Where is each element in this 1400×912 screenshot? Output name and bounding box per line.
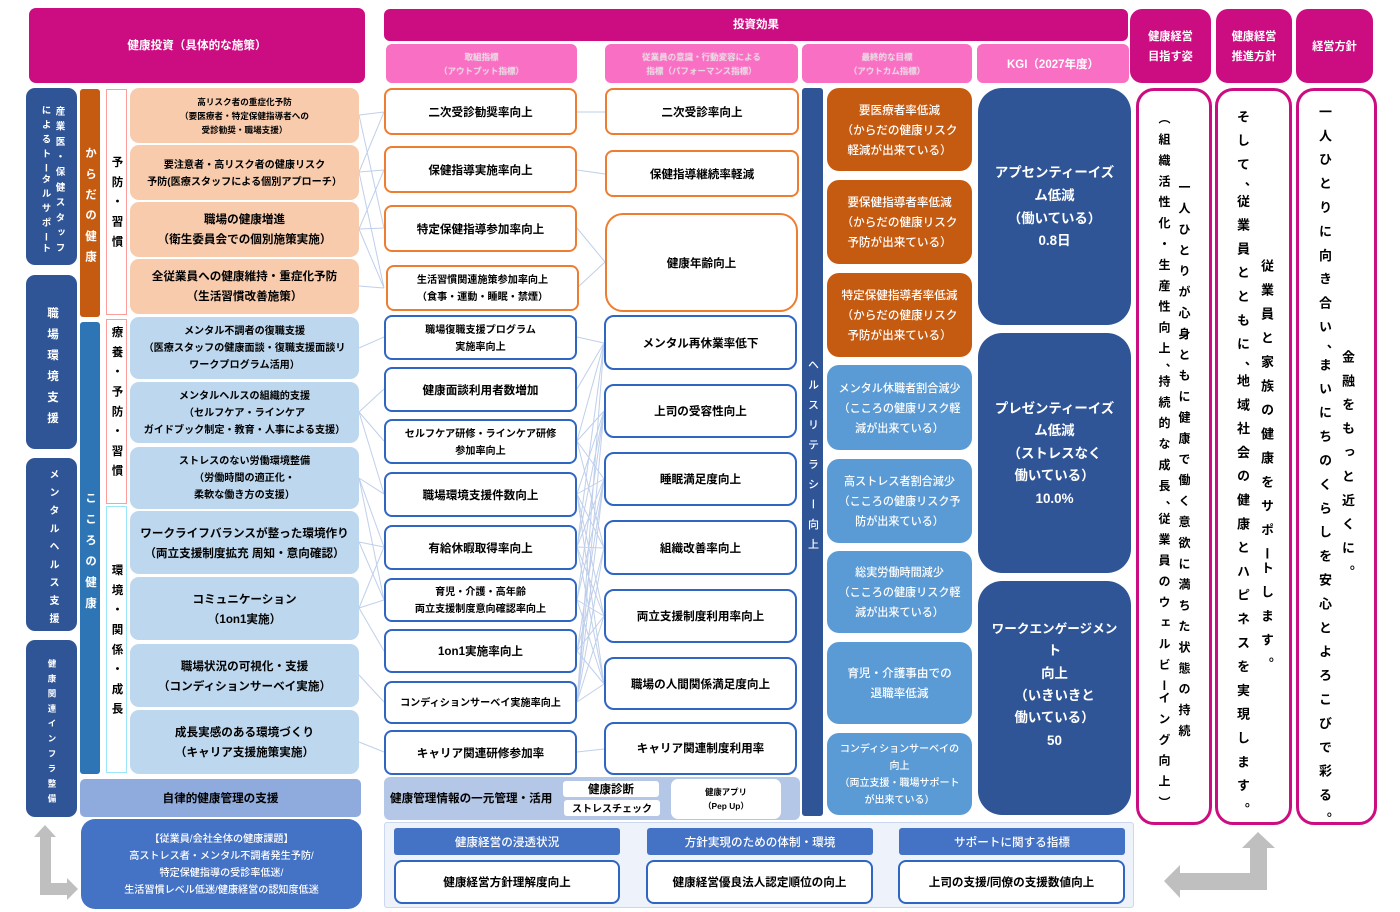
band: physical health xyxy=(80,89,100,317)
measure: workplace visualization: 職場状況の可視化・支援 xyxy=(181,660,308,672)
KGI: absenteeism: 0.8日 xyxy=(1038,233,1070,248)
measure: all-employee health maintenance xyxy=(130,259,359,314)
tag: stress check: ストレスチェック xyxy=(572,804,652,814)
subheading: KGI: KGI（2027年度） xyxy=(1007,58,1099,70)
band: prevention and habits: 予防・習慣 xyxy=(110,156,122,255)
subheading: outcome measures: 最終的な目標 xyxy=(861,52,912,62)
outcome: condition survey improvement: が出来ている） xyxy=(864,795,934,806)
output: health guidance implementation: 保健指導実施率向上 xyxy=(428,164,533,176)
measure: growth environment: 成長実感のある環境づくり xyxy=(175,726,314,739)
performance: organization improvement xyxy=(604,520,797,575)
output: health interview use xyxy=(384,367,577,412)
performance: health guidance continuity: 保健指導継続率軽減 xyxy=(650,168,754,180)
measure: organizational mental health xyxy=(130,382,359,443)
measure: high-risk prevention: （要医療者・特定保健指導者への xyxy=(180,110,309,120)
panel: left support label 1 xyxy=(26,88,77,265)
output: specific guidance participation xyxy=(384,205,577,252)
KGI: absenteeism xyxy=(978,88,1131,325)
tag: health app: （Pep Up） xyxy=(703,801,749,811)
callout: health issues: 特定保健指導の受診率低迷/ xyxy=(160,868,283,878)
heading: promotion policy xyxy=(1216,9,1292,83)
band: environment, relations and growth: 環境・関係・成長 xyxy=(110,564,122,722)
band: environment, relations and growth xyxy=(106,506,127,773)
outcome: working hours xyxy=(827,551,972,633)
output: lifestyle program participation: （食事・運動・睡眠・禁煙） xyxy=(417,292,548,303)
outcome: working hours: （こころの健康リスク軽 xyxy=(838,587,961,599)
text: finance closer: 金融をもっと近くに 。 xyxy=(1340,350,1355,578)
measure: return-to-work support: ワークプログラム活用） xyxy=(189,360,300,371)
subheading: support indicators xyxy=(899,828,1125,855)
KGI: work engagement: 働いている） xyxy=(1015,710,1094,725)
performance: balance support use: 両立支援制度利用率向上 xyxy=(637,610,764,623)
measure: autonomous health management: 自律的健康管理の支援 xyxy=(163,792,278,804)
tag: stress check xyxy=(564,800,660,816)
measure: communication: コミュニケーション xyxy=(192,592,297,606)
output: health interview use: 健康面談利用者数増加 xyxy=(423,384,538,396)
subheading: performance measures xyxy=(605,44,798,83)
callout: health issues xyxy=(81,819,362,909)
heading: management policy xyxy=(1296,9,1373,83)
KGI: work engagement: （いきいきと xyxy=(1014,688,1095,703)
text: occupational staff: 産業医・保健スタッフ xyxy=(54,106,64,258)
measure: return-to-work support xyxy=(130,317,359,379)
outcome: care-related resignation: 育児・介護事由での xyxy=(847,667,952,680)
performance: health guidance continuity xyxy=(605,150,799,197)
output: balance support intent: 育児・介護・高年齢 xyxy=(435,587,526,598)
outcome: mental leave ratio xyxy=(827,365,972,450)
heading: promotion policy: 健康経営 xyxy=(1232,31,1276,43)
output: specific guidance participation: 特定保健指導参加率向上 xyxy=(417,222,544,236)
panel: workplace environment support xyxy=(26,275,77,449)
output: care training xyxy=(384,419,577,464)
subheading: outcome measures: （アウトカム指標） xyxy=(849,66,925,76)
performance: manager receptiveness: 上司の受容性向上 xyxy=(654,405,747,418)
output: workplace support cases: 職場環境支援件数向上 xyxy=(423,488,538,502)
performance: sleep satisfaction xyxy=(604,452,797,506)
KGI: presenteeism: 10.0% xyxy=(1036,491,1073,506)
measure: stress-free labor environment: （労働時間の適正化・ xyxy=(194,473,295,484)
subheading: output measures: （アウトプット指標） xyxy=(439,66,524,76)
output: lifestyle program participation: 生活習慣関連施策参加率向上 xyxy=(417,275,548,286)
heading: vision: 目指す姿 xyxy=(1148,51,1193,63)
KGI: absenteeism: ム低減 xyxy=(1034,188,1075,203)
output: balance support intent xyxy=(384,578,577,622)
output: paid leave: 有給休暇取得率向上 xyxy=(428,542,533,554)
text: unified management: 健康管理情報の一元管理・活用 xyxy=(390,792,552,804)
measure: health risk prevention: 要注意者・高リスク者の健康リスク xyxy=(164,160,325,170)
outcome: mental leave ratio: 減が出来ている） xyxy=(855,422,944,434)
performance: health age xyxy=(605,213,798,312)
performance: manager receptiveness xyxy=(604,384,797,438)
heading: management policy: 経営方針 xyxy=(1312,41,1357,53)
output: return-to-work program: 職場復職支援プログラム xyxy=(425,324,536,336)
band: prevention and habits xyxy=(106,89,127,315)
heading: investment effect: 投資効果 xyxy=(733,19,779,31)
output: return-to-work program xyxy=(384,315,577,360)
performance: balance support use xyxy=(604,589,797,643)
measure: growth environment xyxy=(130,710,359,774)
performance: secondary exam: 二次受診率向上 xyxy=(661,106,743,118)
outcome: care-required rate: （からだの健康リスク xyxy=(842,124,957,136)
subheading: output measures xyxy=(386,44,577,83)
performance: mental re-leave: メンタル再休業率低下 xyxy=(643,336,758,350)
callout: health issues: 高ストレス者・メンタル不調者発生予防/ xyxy=(129,850,314,862)
panel: promotion policy text xyxy=(1215,88,1292,825)
measure: organizational mental health: ガイドブック制定・教育・人事による支援） xyxy=(144,425,345,436)
measure: organizational mental health: （セルフケア・ラインケア xyxy=(184,408,305,419)
outcome: condition survey improvement: （両立支援・職場サポート xyxy=(840,778,960,789)
outcome: high stress ratio: 高ストレス者割合減少 xyxy=(844,476,955,488)
outcome: condition survey improvement: コンディションサーベイの xyxy=(840,744,959,755)
KGI: absenteeism: アプセンティーイズ xyxy=(995,165,1114,180)
tag: health checkup: 健康診断 xyxy=(588,784,634,796)
callout: health issues: 生活習慣レベル低迷/健康経営の認知度低迷 xyxy=(124,884,319,896)
KGI: presenteeism: プレゼンティーイズ xyxy=(995,401,1114,416)
arrow: feedback right xyxy=(1164,832,1275,898)
KGI: work engagement: ト xyxy=(1048,643,1061,658)
heading: investment effect xyxy=(384,9,1128,41)
output: lifestyle program participation xyxy=(386,265,579,311)
measure: workplace visualization xyxy=(130,644,359,707)
outcome: care-required rate xyxy=(827,88,972,171)
measure: workplace health promotion: 職場の健康増進 xyxy=(204,213,285,226)
measure: health risk prevention xyxy=(130,145,359,200)
output: 1on1: 1on1実施率向上 xyxy=(438,645,523,658)
measure: all-employee health maintenance: （生活習慣改善施策） xyxy=(187,290,302,303)
outcome: specific guidance rate: 予防が出来ている） xyxy=(847,329,952,342)
panel: health information management xyxy=(384,777,800,820)
output: condition survey: コンディションサーベイ実施率向上 xyxy=(400,698,561,709)
performance: mental re-leave xyxy=(604,315,797,370)
text: community happiness: そして 、 従業員とともに 、 地域社会の健康とハピネスを実現します 。 xyxy=(1235,110,1250,815)
measure: return-to-work support: メンタル不調者の復職支援 xyxy=(184,326,305,337)
outcome: high stress ratio xyxy=(827,459,972,543)
measure: stress-free labor environment: ストレスのない労働環境整備 xyxy=(179,456,310,467)
outcome: condition survey improvement xyxy=(827,733,972,815)
band: mental health: こころの健康 xyxy=(84,492,96,618)
heading: health investment xyxy=(29,8,365,83)
arrow: feedback left xyxy=(34,825,78,900)
panel: health infrastructure xyxy=(26,640,77,817)
KGI: presenteeism xyxy=(978,333,1131,573)
band: treatment, prevention and habits xyxy=(106,319,127,504)
outcome: mental leave ratio: （こころの健康リスク軽 xyxy=(838,402,961,414)
output: care training: 参加率向上 xyxy=(455,446,506,456)
subheading: penetration: 健康経営の浸透状況 xyxy=(455,836,559,848)
output: health guidance implementation xyxy=(384,146,577,193)
bar: health literacy xyxy=(802,88,823,816)
panel: management policy text xyxy=(1296,88,1377,825)
measure: work-life balance xyxy=(130,511,359,574)
outcome: guidance-required rate xyxy=(827,180,972,264)
subheading: performance measures: 従業員の意識・行動変容による xyxy=(642,52,761,62)
heading: vision xyxy=(1130,9,1211,83)
outcome: care-required rate: 要医療者率低減 xyxy=(859,104,940,116)
subheading: support indicators: サポートに関する指標 xyxy=(954,836,1070,848)
KGI: absenteeism: （働いている） xyxy=(1008,210,1101,226)
outcome: care-related resignation xyxy=(827,642,972,724)
panel: vision text xyxy=(1136,88,1212,825)
output: care training: セルフケア研修・ラインケア研修 xyxy=(405,428,556,440)
outcome: care-related resignation: 退職率低減 xyxy=(870,687,928,700)
measure: work-life balance: ワークライフバランスが整った環境作り xyxy=(140,526,349,540)
text: vision main: 一人ひとりが心身ともに健康で働く意欲に満ちた状態の持続 xyxy=(1177,181,1191,745)
panel: workplace environment support: 職場環境支援 xyxy=(46,307,58,433)
text: daily life: 一人ひとりに向き合い 、 まいにちのくらしを安心とよろこびで彩る 。 xyxy=(1317,104,1332,825)
outcome: working hours: 減が出来ている） xyxy=(855,607,944,619)
indicator: certification ranking: 健康経営優良法人認定順位の向上 xyxy=(673,876,846,888)
KGI: presenteeism: ム低減 xyxy=(1034,423,1075,438)
tag: health app xyxy=(671,779,781,819)
outcome: mental leave ratio: メンタル休職者割合減少 xyxy=(838,382,961,394)
measure: communication xyxy=(130,577,359,640)
heading: promotion policy: 推進方針 xyxy=(1232,51,1276,63)
outcome: care-required rate: 軽減が出来ている） xyxy=(847,144,952,156)
measure: workplace health promotion xyxy=(130,202,359,257)
panel: bottom health management indicators xyxy=(384,822,1134,908)
KGI: work engagement: ワークエンゲージメン xyxy=(992,622,1117,636)
measure: stress-free labor environment: 柔軟な働き方の支援） xyxy=(194,490,295,501)
outcome: guidance-required rate: 要保健指導者率低減 xyxy=(847,196,952,209)
bar: health literacy: ヘルスリテラシー向上 xyxy=(806,359,818,558)
measure: return-to-work support: （医療スタッフの健康面談・復職支援面談リ xyxy=(144,343,345,354)
outcome: working hours: 総実労働時間減少 xyxy=(855,567,944,579)
KGI: work engagement: 向上 xyxy=(1041,666,1068,681)
text: total support: によるト ー タルサポ ー ト xyxy=(40,105,50,258)
output: secondary exam recommendation xyxy=(384,88,577,135)
measure: high-risk prevention: 高リスク者の重症化予防 xyxy=(197,96,292,106)
measure: autonomous health management xyxy=(80,779,361,817)
outcome: specific guidance rate xyxy=(827,273,972,357)
tag: health app: 健康アプリ xyxy=(705,787,747,797)
outcome: guidance-required rate: 予防が出来ている） xyxy=(847,236,952,249)
output: workplace support cases xyxy=(384,472,577,517)
indicator: supervisor and colleague support xyxy=(898,860,1125,904)
subheading: KGI xyxy=(977,44,1129,83)
band: mental health xyxy=(80,322,100,774)
measure: growth environment: （キャリア支援施策実施） xyxy=(175,746,314,759)
subheading: performance measures: 指標（パフォーマンス指標） xyxy=(646,66,757,76)
heading: vision: 健康経営 xyxy=(1148,31,1193,43)
measure: high-risk prevention xyxy=(130,88,359,143)
callout: health issues: 【従業員/会社全体の健康課題】 xyxy=(149,834,294,844)
tag: health checkup xyxy=(563,781,659,797)
performance: workplace relations xyxy=(604,657,797,710)
KGI: work engagement xyxy=(978,581,1131,815)
output: paid leave xyxy=(384,525,577,570)
indicator: policy understanding xyxy=(394,860,620,904)
outcome: high stress ratio: （こころの健康リスク予 xyxy=(838,496,961,508)
subheading: penetration xyxy=(394,828,620,855)
outcome: condition survey improvement: 向上 xyxy=(890,761,910,772)
output: condition survey xyxy=(384,681,577,724)
measure: organizational mental health: メンタルヘルスの組織的支援 xyxy=(179,391,310,402)
performance: health age: 健康年齢向上 xyxy=(667,256,736,270)
measure: all-employee health maintenance: 全従業員への健康維持・重症化予防 xyxy=(152,270,337,283)
indicator: supervisor and colleague support: 上司の支援/同僚の支援数値向上 xyxy=(929,876,1094,888)
indicator: policy understanding: 健康経営方針理解度向上 xyxy=(443,876,571,888)
subheading: system and environment: 方針実現のための体制・環境 xyxy=(685,836,835,848)
panel: mental health support: メンタルヘルス支援 xyxy=(47,469,58,631)
output: career training xyxy=(384,730,577,775)
measure: work-life balance: （両立支援制度拡充 周知・意向確認） xyxy=(144,546,345,560)
output: secondary exam recommendation: 二次受診勧奨率向上 xyxy=(428,106,533,118)
measure: communication: （1on1実施） xyxy=(208,612,281,626)
measure: stress-free labor environment xyxy=(130,447,359,509)
text: employees and families: 従業員と家族の健康をサポ ー トします 。 xyxy=(1259,258,1274,670)
outcome: guidance-required rate: （からだの健康リスク xyxy=(842,216,957,229)
outcome: high stress ratio: 防が出来ている） xyxy=(855,516,944,528)
panel: mental health support xyxy=(26,458,77,631)
band: physical health: からだの健康 xyxy=(84,147,96,271)
output: career training: キャリア関連研修参加率 xyxy=(417,746,544,760)
output: 1on1 xyxy=(384,629,577,673)
performance: career system use: キャリア関連制度利用率 xyxy=(637,742,764,754)
band: treatment, prevention and habits: 療養・予防・習慣 xyxy=(110,326,122,484)
heading: health investment: 健康投資（具体的な施策） xyxy=(127,39,267,52)
KGI: presenteeism: 働いている） xyxy=(1015,468,1094,483)
measure: workplace visualization: （コンディションサーベイ実施） xyxy=(158,680,331,692)
KGI: presenteeism: （ストレスなく xyxy=(1008,446,1101,461)
measure: health risk prevention: 予防(医療スタッフによる個別アプローチ） xyxy=(147,176,342,188)
panel: health infrastructure: 健康関連インフラ整備 xyxy=(47,659,57,809)
performance: career system use xyxy=(604,722,797,775)
performance: organization improvement: 組織改善率向上 xyxy=(660,542,741,554)
KGI: work engagement: 50 xyxy=(1047,733,1062,748)
outcome: specific guidance rate: （からだの健康リスク xyxy=(842,309,957,322)
performance: secondary exam xyxy=(605,88,799,135)
output: return-to-work program: 実施率向上 xyxy=(455,342,506,352)
output: balance support intent: 両立支援制度意向確認率向上 xyxy=(415,604,546,615)
indicator: certification ranking xyxy=(646,860,873,904)
measure: workplace health promotion: （衛生委員会での個別施策実施） xyxy=(158,233,331,246)
text: vision detail: （組織活性化・生産性向上 、 持続的な成長 、 従業員のウェルビ ー イング向上） xyxy=(1157,112,1171,817)
subheading: system and environment xyxy=(647,828,873,855)
outcome: specific guidance rate: 特定保健指導者率低減 xyxy=(842,289,957,302)
performance: sleep satisfaction: 睡眠満足度向上 xyxy=(660,473,741,486)
subheading: output measures: 取組指標 xyxy=(464,52,498,62)
measure: high-risk prevention: 受診勧奨・職場支援） xyxy=(202,124,287,134)
subheading: outcome measures xyxy=(802,44,972,83)
performance: workplace relations: 職場の人間関係満足度向上 xyxy=(631,678,770,690)
